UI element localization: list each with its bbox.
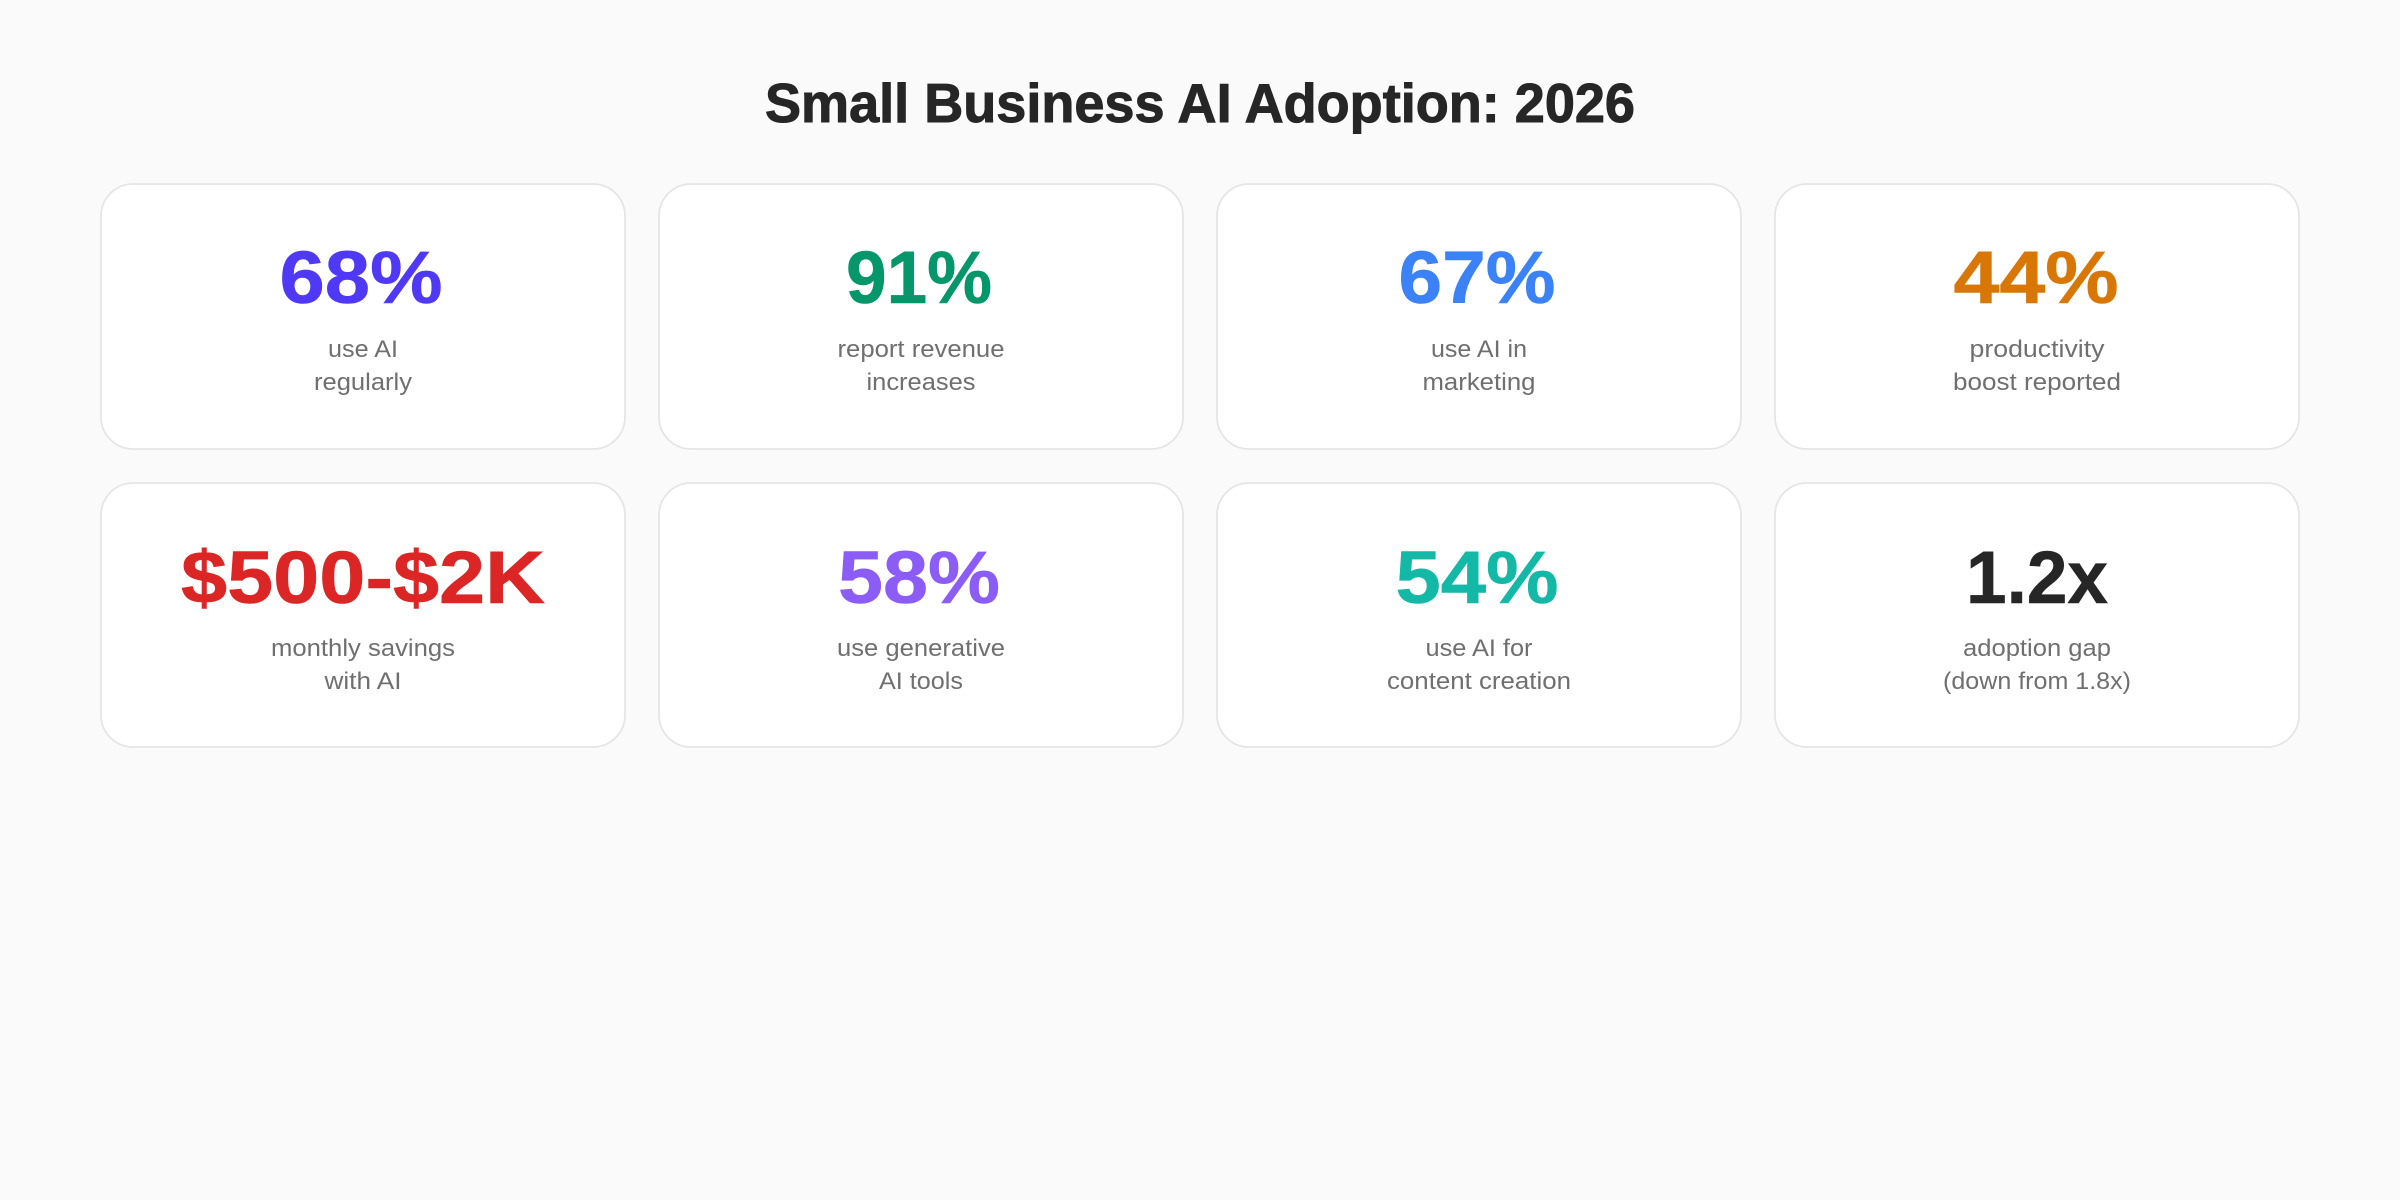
label: use AI regularly: use AI <box>328 336 398 363</box>
stat: 44%: 44% <box>1954 236 2118 319</box>
label: report revenue increases: report revenue <box>838 336 1004 363</box>
label: use generative AI tools: AI tools <box>879 668 963 695</box>
stat: 91%: 91% <box>846 236 992 319</box>
label: productivity boost reported: boost reported <box>1953 369 2121 396</box>
stat: 54%: 54% <box>1396 536 1558 619</box>
label: use AI for content creation: use AI for <box>1426 635 1532 662</box>
panel: $500-$2K monthly savings with AI <box>101 483 625 747</box>
stat: 58%: 58% <box>838 536 1000 619</box>
label: adoption gap (down from 1.8x) <box>1943 635 2131 695</box>
label: use generative AI tools: use generative <box>837 635 1005 662</box>
label: productivity boost reported: productivity <box>1970 336 2105 363</box>
stat: 68%: 68% <box>280 236 442 319</box>
label: report revenue increases: increases <box>866 369 976 396</box>
label: productivity boost reported <box>1953 336 2121 396</box>
label: use AI in marketing: marketing <box>1422 369 1536 396</box>
stat: 67%: 67% <box>1398 236 1556 319</box>
label: use AI regularly <box>314 336 413 396</box>
panel: 58% use generative AI tools <box>659 483 1183 747</box>
label: monthly savings with AI: monthly savings <box>271 635 455 662</box>
label: adoption gap (down from 1.8x): (down from 1.8x) <box>1943 668 2131 695</box>
stat: $500-$2K: $500-$2K <box>181 536 545 619</box>
label: monthly savings with AI <box>271 635 455 695</box>
label: use AI regularly: regularly <box>314 369 413 396</box>
panel: 44% productivity boost reported <box>1775 184 2299 449</box>
label: use AI in marketing: use AI in <box>1431 336 1527 363</box>
label: use generative AI tools <box>837 635 1005 695</box>
panel: 1.2x adoption gap <box>1775 483 2299 747</box>
label: use AI for content creation: content creation <box>1387 668 1571 695</box>
panel: 54% use AI for content creation <box>1217 483 1741 747</box>
label: monthly savings with AI: with AI <box>323 668 402 695</box>
label: adoption gap (down from 1.8x): adoption gap <box>1963 635 2111 662</box>
label: report revenue increases <box>838 336 1004 396</box>
panel: 91% report revenue increases <box>659 184 1183 449</box>
panel: 68% use AI regularly <box>101 184 625 449</box>
panel: 67% use AI in marketing <box>1217 184 1741 449</box>
stat: 1.2x: 1.2x <box>1966 536 2108 619</box>
title: Small Business AI Adoption: 2026 <box>765 72 1635 134</box>
label: use AI in marketing <box>1422 336 1536 396</box>
label: use AI for content creation <box>1387 635 1571 695</box>
